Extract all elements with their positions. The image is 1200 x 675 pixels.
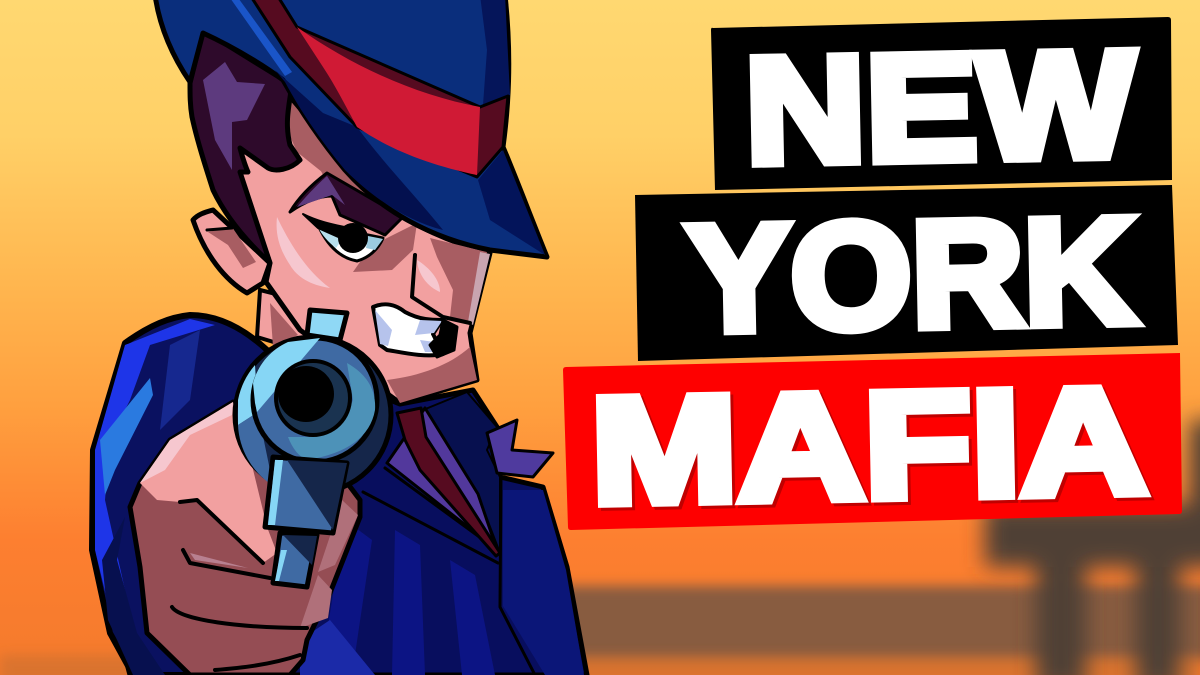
hair — [190, 30, 300, 263]
character: gangster with gun — [92, 0, 587, 675]
cheek highlight — [277, 217, 330, 288]
nose line — [412, 255, 470, 323]
title line: MAFIA: MAFIA — [589, 355, 1149, 535]
background: blurred street and tower silhouette — [0, 420, 1200, 675]
under-eye shadow — [353, 223, 417, 272]
grip — [273, 533, 317, 587]
barrel block — [265, 457, 347, 533]
front sight — [307, 310, 347, 340]
eye — [303, 214, 383, 261]
muzzle ring — [253, 338, 377, 462]
hat — [155, 0, 547, 257]
teeth — [373, 304, 443, 355]
hand and fist — [130, 402, 360, 675]
title line: YORK: YORK — [685, 185, 1138, 363]
revolver — [235, 310, 391, 587]
ear — [193, 210, 270, 293]
rear barrel — [235, 337, 391, 493]
title line: MAFIA: MAFIA — [592, 358, 1152, 538]
title block — [563, 17, 1182, 538]
pocket square — [487, 420, 553, 477]
shirt and red tie — [387, 408, 500, 556]
title line: NEW: NEW — [743, 19, 1137, 195]
mustache — [430, 320, 457, 357]
torso and suit jacket — [110, 350, 587, 675]
sleeve — [92, 315, 290, 675]
neck — [257, 290, 400, 404]
face — [237, 90, 490, 403]
eyebrow — [290, 173, 403, 235]
hat band — [250, 0, 508, 177]
